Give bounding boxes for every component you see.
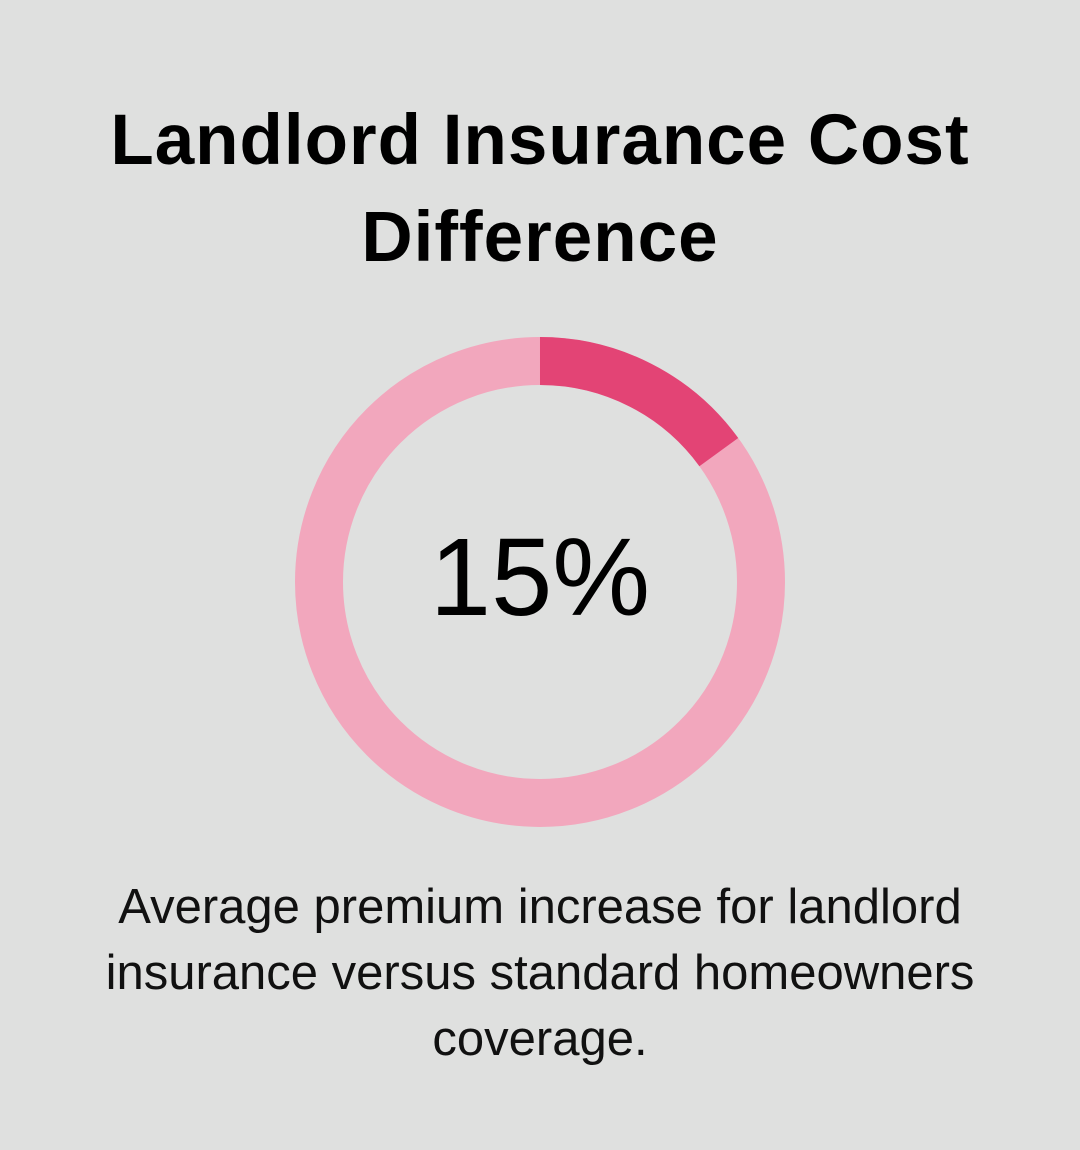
donut background ring — [319, 361, 761, 803]
description text: Average premium increase for landlord — [118, 880, 962, 934]
title: Difference — [361, 198, 719, 277]
title: Landlord Insurance Cost — [110, 101, 970, 180]
title — [110, 101, 970, 277]
description text — [106, 880, 974, 1066]
description text: insurance versus standard homeowners — [106, 946, 974, 1000]
donut highlighted segment 15% — [540, 361, 719, 452]
center value: 15% — [430, 516, 650, 639]
donut chart — [295, 337, 785, 827]
description text: coverage. — [432, 1012, 648, 1066]
